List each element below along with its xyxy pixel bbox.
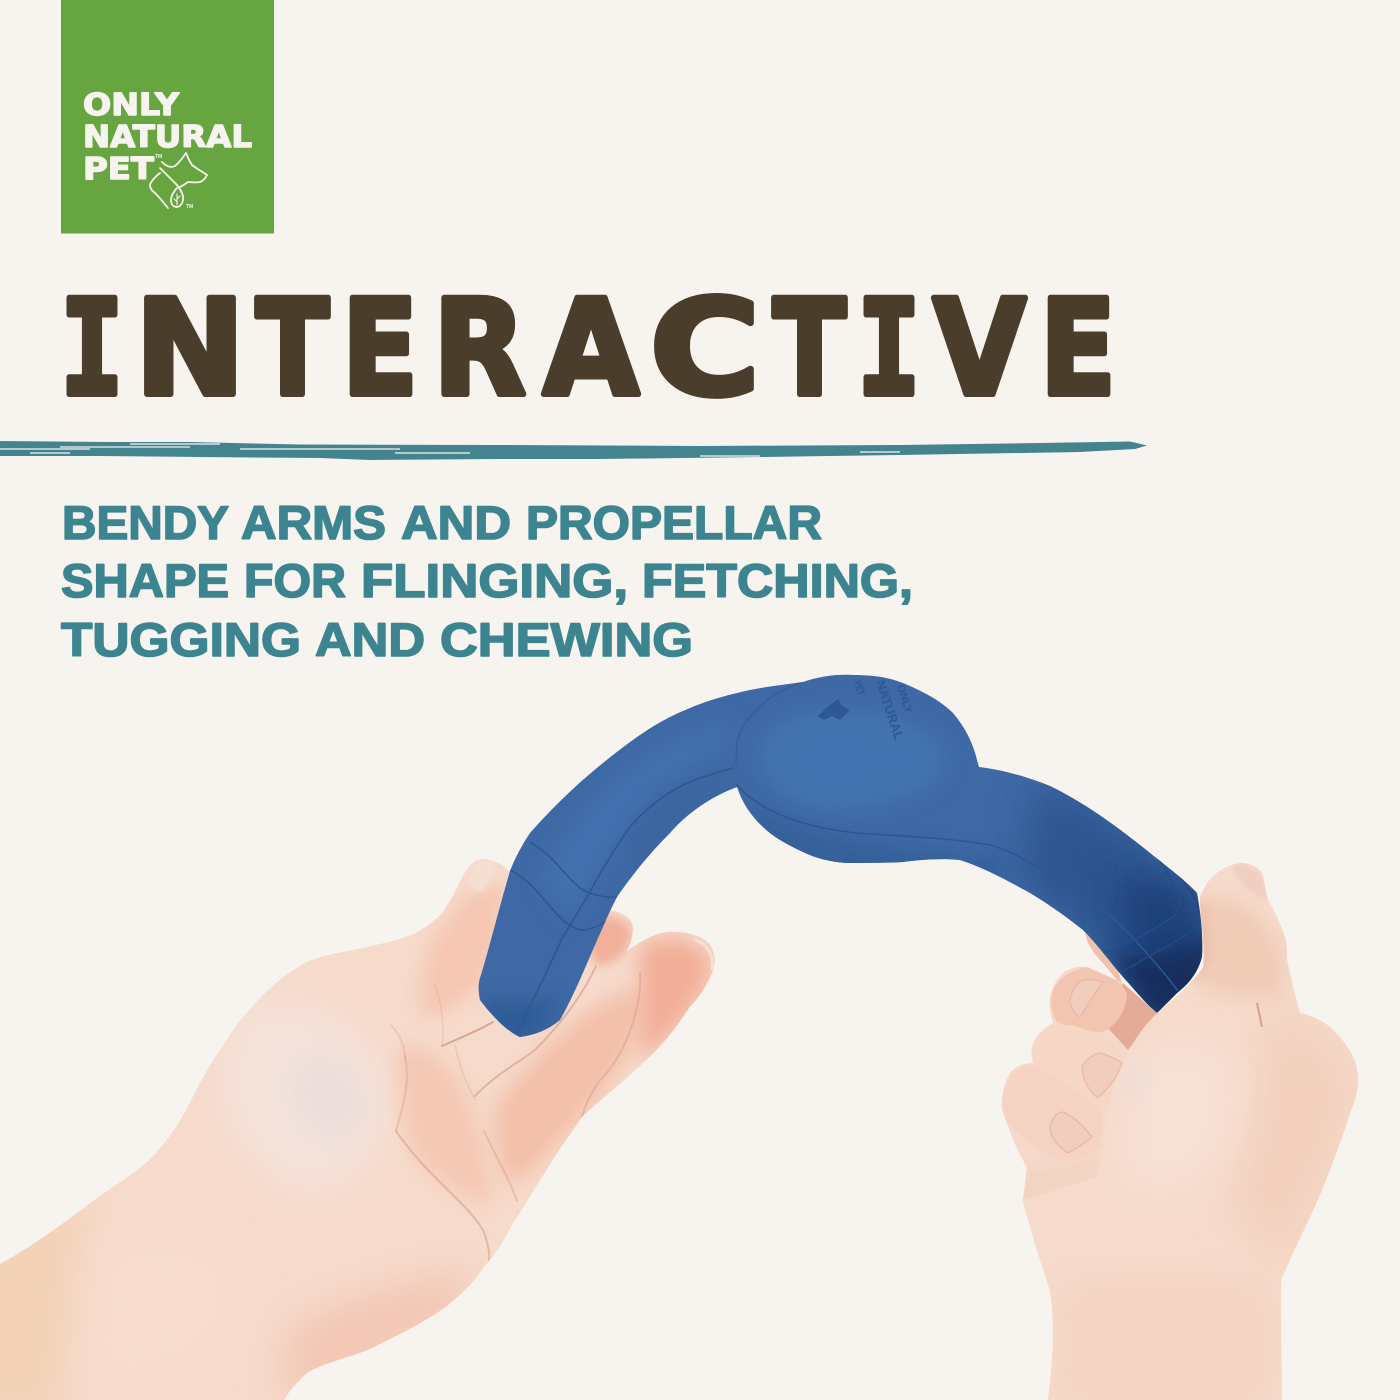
line 3: TUGGING (61, 613, 301, 666)
toy: bent blue rubber propeller (470, 670, 1210, 1045)
top finger (1051, 967, 1127, 1032)
title: A (543, 272, 639, 426)
logo wordmark: PET (83, 152, 155, 187)
embossed toy logo: ONLY (894, 683, 915, 715)
line 3: AND (315, 613, 425, 666)
title: E (342, 272, 418, 426)
line 1 (62, 496, 822, 549)
line 2: FOR (244, 554, 346, 607)
title: I (857, 272, 921, 426)
line 1: AND (401, 496, 511, 549)
index fingernail edge (695, 940, 712, 970)
trademark marks: TM (155, 154, 162, 160)
skin tone shading (0, 885, 712, 1400)
icon: embossed dog (818, 699, 850, 720)
line 2: SHAPE (61, 554, 229, 607)
line 2 (61, 554, 913, 607)
title: E (1040, 272, 1116, 426)
embossed toy logo: NATURAL (873, 678, 907, 742)
fingers and palm (990, 850, 1370, 1400)
mould seams and ridges (510, 682, 1198, 1033)
back of hand and thumb (1020, 850, 1370, 1400)
thumb nail (1235, 866, 1264, 896)
title: T (773, 272, 846, 426)
title: I (60, 272, 124, 426)
logo panel (61, 0, 274, 234)
subheading (61, 496, 913, 666)
left hand (0, 850, 730, 1400)
back of hand shading (1088, 894, 1348, 1384)
line 3 (61, 613, 693, 666)
lower finger base (1024, 1178, 1026, 1194)
trademark marks (155, 154, 193, 210)
right hand (990, 850, 1370, 1400)
line 1: ARMS (241, 496, 386, 549)
title: N (135, 272, 245, 426)
title (60, 272, 1116, 426)
trademark marks: TM (186, 204, 193, 210)
icon: dog, cat and leaf line mark (150, 153, 207, 208)
line 3: CHEWING (440, 613, 693, 666)
brush stroke divider (0, 441, 1147, 460)
line 1: PROPELLAR (526, 496, 822, 549)
title: V (933, 272, 1026, 426)
right hand back finger (1085, 933, 1125, 990)
middle finger (1065, 1025, 1089, 1031)
logo wordmark: ONLY (83, 88, 180, 123)
title: R (433, 272, 526, 426)
fingernails (1050, 980, 1122, 1153)
line 1: BENDY (62, 496, 229, 549)
title: C (650, 272, 760, 426)
scratch mark (1257, 1003, 1262, 1027)
logo wordmark: NATURAL (83, 120, 252, 155)
lower finger (1002, 1065, 1103, 1160)
title: T (256, 272, 329, 426)
embossed toy logo (818, 678, 915, 742)
thumb nail (470, 871, 491, 892)
palm creases and finger grooves (391, 966, 640, 1260)
embossed toy logo: PET (851, 680, 866, 697)
line 2: FETCHING, (642, 554, 913, 607)
logo wordmark (83, 88, 252, 187)
shadow behind top finger (1107, 983, 1157, 1050)
toy shading (480, 708, 1210, 1045)
line 2: FLINGING, (361, 554, 628, 607)
